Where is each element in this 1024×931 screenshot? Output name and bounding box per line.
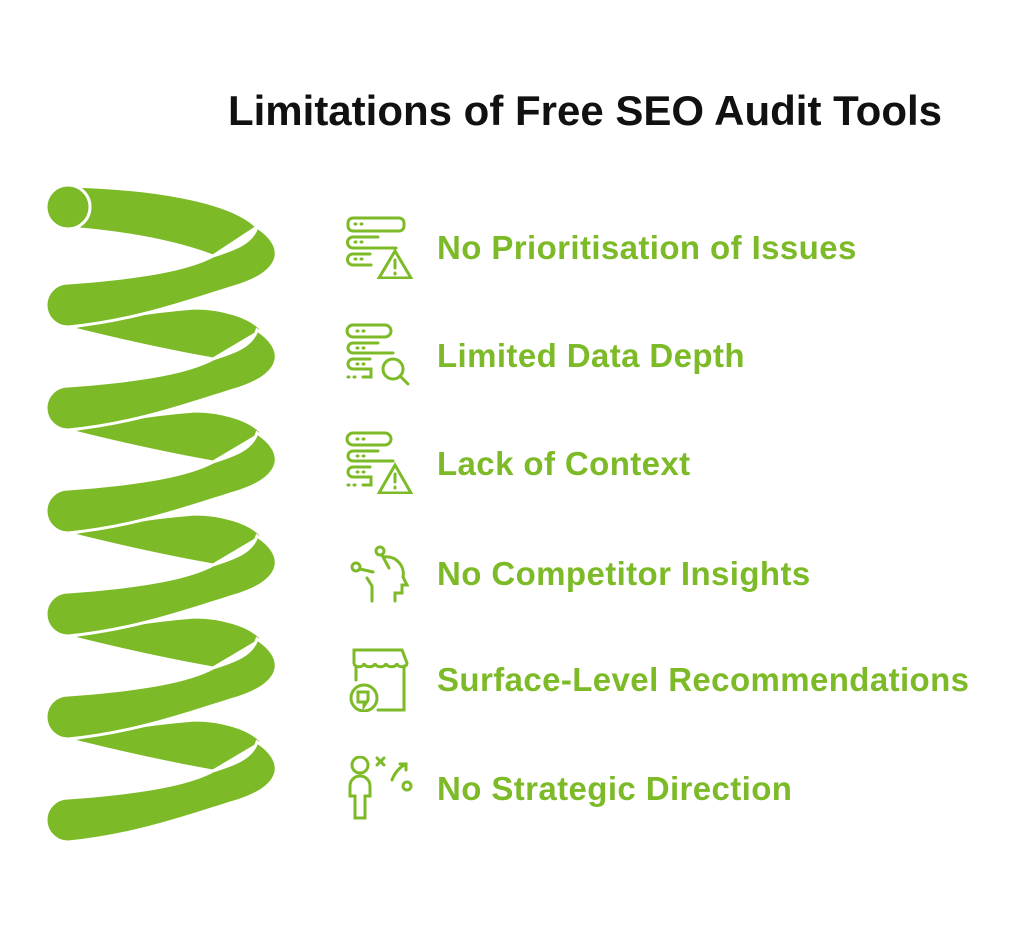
title: Limitations of Free SEO Audit Tools (228, 87, 942, 134)
icon: head with pins (350, 546, 410, 602)
icon: server warning (346, 216, 414, 279)
icon: server warning 2 (346, 432, 414, 494)
icon: person strategy (348, 756, 412, 820)
icon: shop thumbs down (350, 648, 408, 712)
spring coil (48, 186, 275, 840)
text: No Competitor Insights: No Competitor Insights (437, 555, 811, 592)
icon: server search (346, 324, 410, 386)
text: No Prioritisation of Issues: No Prioritisation of Issues (437, 229, 857, 266)
text: Lack of Context: Lack of Context (437, 445, 691, 482)
text: Surface-Level Recommendations: Surface-Level Recommendations (437, 661, 969, 698)
text: Limited Data Depth: Limited Data Depth (437, 337, 745, 374)
text: No Strategic Direction: No Strategic Direction (437, 770, 792, 807)
